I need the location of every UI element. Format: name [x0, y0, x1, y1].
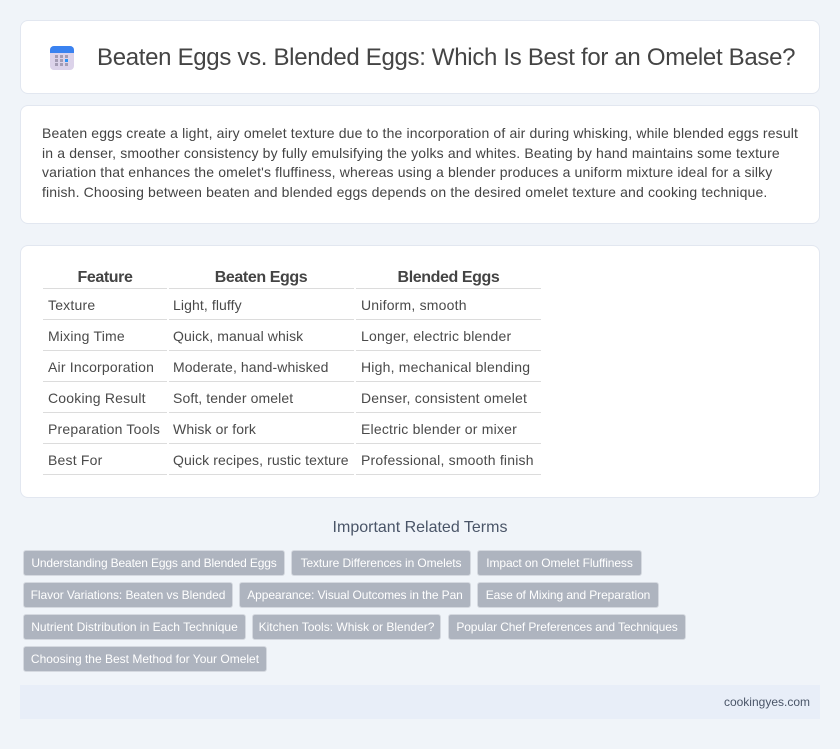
- row: air incorporation: [48, 359, 530, 375]
- tag: Choosing the Best Method for Your Omelet: [31, 652, 259, 666]
- row: air incorporation: High, mechanical blending: [361, 359, 530, 375]
- intro line 2: in a denser, smoother consistency by fully emulsifying the yolks and whites. Beating by hand maintains some texture: [42, 145, 780, 161]
- row: cooking result: Denser, consistent omelet: [361, 390, 527, 406]
- tag: [477, 550, 642, 576]
- row: best for: [48, 452, 534, 468]
- row: preparation tools: Electric blender or mixer: [361, 421, 517, 437]
- tag: [448, 614, 686, 640]
- tag: [291, 550, 471, 576]
- related term tags: [23, 550, 686, 672]
- panel: header: [20, 20, 820, 94]
- panel: comparison table: [20, 245, 820, 498]
- intro line 1: Beaten eggs create a light, airy omelet texture due to the incorporation of air during whisking, while blended eggs result: [42, 125, 798, 141]
- tag: [23, 582, 233, 608]
- row: preparation tools: Preparation Tools: [48, 421, 160, 437]
- row: cooking result: Cooking Result: [48, 390, 146, 406]
- tag: [23, 550, 285, 576]
- tag: [23, 646, 267, 672]
- title: Beaten Eggs vs. Blended Eggs: Which Is Best for an Omelet Base?: [97, 44, 795, 71]
- row: cooking result: [48, 390, 527, 406]
- panel: intro text: [20, 105, 820, 224]
- row: air incorporation: Moderate, hand-whisked: [173, 359, 329, 375]
- row: mixing time: [48, 328, 511, 344]
- row: preparation tools: Whisk or fork: [173, 421, 256, 437]
- row: best for: Best For: [48, 452, 103, 468]
- row: cooking result: Soft, tender omelet: [173, 390, 293, 406]
- tag: Understanding Beaten Eggs and Blended Eggs: [31, 556, 277, 570]
- table header: Beaten Eggs: [215, 269, 307, 286]
- table header: [78, 269, 500, 286]
- intro line 4: finish. Choosing between beaten and blended eggs depends on the desired omelet texture and cooking technique.: [42, 184, 767, 200]
- row: texture: [48, 297, 467, 313]
- row: mixing time: Mixing Time: [48, 328, 125, 344]
- tag: Impact on Omelet Fluffiness: [486, 556, 633, 570]
- tag: [252, 614, 441, 640]
- row: best for: Quick recipes, rustic texture: [173, 452, 349, 468]
- row: texture: Texture: [48, 297, 95, 313]
- row: texture: Uniform, smooth: [361, 297, 467, 313]
- tag: [239, 582, 471, 608]
- footer: [20, 685, 820, 719]
- tag: Kitchen Tools: Whisk or Blender?: [259, 620, 434, 634]
- tag: [477, 582, 659, 608]
- footer source: cookingyes.com: [724, 695, 810, 709]
- row: mixing time: Longer, electric blender: [361, 328, 511, 344]
- intro line 3: variation that enhances the omelet's fluffiness, whereas using a blender produces a uniform mixture ideal for a silky: [42, 164, 772, 180]
- icon: calendar: [50, 46, 74, 70]
- table header: Blended Eggs: [398, 269, 499, 286]
- tag: Texture Differences in Omelets: [301, 556, 461, 570]
- row: mixing time: Quick, manual whisk: [173, 328, 303, 344]
- row: best for: Professional, smooth finish: [361, 452, 534, 468]
- tag: Ease of Mixing and Preparation: [486, 588, 650, 602]
- tag: Appearance: Visual Outcomes in the Pan: [247, 588, 463, 602]
- tag: Flavor Variations: Beaten vs Blended: [31, 588, 225, 602]
- row: air incorporation: Air Incorporation: [48, 359, 154, 375]
- tag: Popular Chef Preferences and Techniques: [456, 620, 678, 634]
- row: preparation tools: [48, 421, 517, 437]
- tag: Nutrient Distribution in Each Technique: [31, 620, 238, 634]
- table header: Feature: [78, 269, 132, 286]
- row: texture: Light, fluffy: [173, 297, 242, 313]
- heading: related terms: Important Related Terms: [333, 519, 507, 536]
- tag: [23, 614, 246, 640]
